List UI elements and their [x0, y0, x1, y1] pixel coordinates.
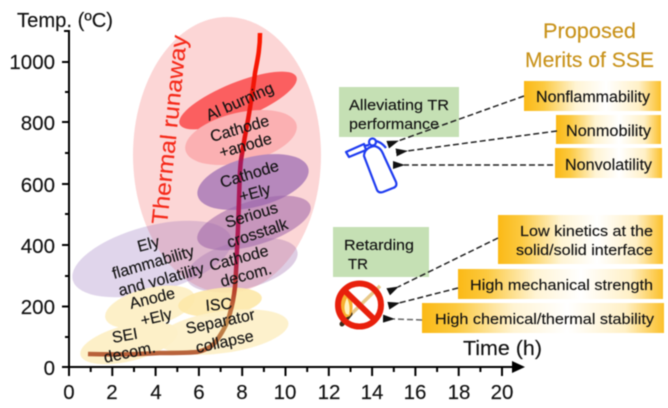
label: Cathode Ely: Cathode	[218, 158, 281, 192]
label: Cathode anode: Cathode	[208, 113, 271, 146]
y axis labels: 1000	[9, 51, 55, 74]
label: Separator collapse	[184, 307, 257, 357]
label: Separator collapse: Separator	[184, 307, 257, 338]
label: Ely flammability and volatility	[110, 234, 206, 300]
x axis labels	[63, 381, 513, 404]
panel: retarding TR: TR	[348, 256, 368, 273]
heading: proposed merits: Merits of SSE	[525, 48, 654, 72]
x axis labels: 0	[63, 381, 75, 404]
merit: high mechanical strength: High mechanical strength	[470, 277, 653, 294]
heading: proposed merits: Proposed	[543, 19, 636, 43]
label: SEI decomposition: decom.	[102, 339, 157, 367]
y axis title: Temp. (ºC)	[17, 9, 113, 32]
label: Serious crosstalk	[223, 200, 291, 252]
merit: low kinetics: Low kinetics at the	[520, 223, 653, 240]
zone: Cathode Ely ellipse	[192, 144, 314, 220]
zone: Cathode anode ellipse	[180, 100, 302, 175]
zone: Separator collapse ellipse	[155, 302, 291, 362]
y axis	[62, 31, 69, 367]
panel: alleviating TR: Alleviating TR	[349, 97, 449, 114]
zone: SEI decomposition ellipse	[76, 313, 182, 373]
label: Cathode Ely: +Ely	[238, 181, 273, 206]
label: Cathode decomposition: decom.	[219, 261, 274, 291]
y axis labels: 0	[44, 357, 55, 380]
label: ISC: ISC	[205, 296, 233, 315]
label: Al burning: Al burning	[204, 80, 276, 125]
label: Ely flammability and volatility: flammability	[110, 243, 196, 283]
merit: low kinetics: solid/solid interface	[516, 242, 653, 259]
merit: nonvolatility: Nonvolatility	[565, 157, 652, 174]
merit: high chemical thermal stability: High chemical/thermal stability	[435, 311, 655, 328]
y axis labels: 200	[21, 296, 55, 319]
zone: Anode Ely ellipse	[101, 277, 199, 337]
y axis labels	[9, 51, 55, 380]
zone: ISC ellipse	[177, 284, 263, 320]
x axis labels: 18	[448, 381, 470, 404]
panel: retarding TR: Retarding	[344, 237, 414, 254]
x axis labels: 16	[404, 381, 426, 404]
label: Anode Ely: +Ely	[139, 306, 174, 330]
x axis labels: 8	[236, 381, 248, 404]
panel: retarding TR	[333, 227, 429, 277]
y axis labels: 600	[21, 174, 55, 197]
merit: nonflammability	[524, 81, 661, 111]
arrows: no fire	[394, 238, 498, 320]
merit: nonmobility: Nonmobility	[566, 123, 651, 140]
panel: alleviating TR: performance	[349, 116, 439, 133]
merit: high chemical thermal stability	[422, 303, 664, 333]
x axis title: Time (h)	[463, 337, 542, 360]
zone: Al burning ellipse	[173, 60, 303, 141]
temperature curve	[88, 33, 260, 354]
label: Cathode anode	[208, 113, 274, 162]
label: Separator collapse: collapse	[194, 328, 255, 357]
zone: Cathode decomposition ellipse	[181, 228, 303, 302]
x axis labels: 2	[106, 381, 118, 404]
label: Ely flammability and volatility: and volatility	[117, 261, 206, 300]
icon: fire extinguisher	[346, 138, 396, 192]
zone: Serious crosstalk ellipse	[191, 185, 317, 261]
merit: nonflammability: Nonflammability	[536, 89, 650, 106]
panel: alleviating TR	[339, 87, 459, 137]
x axis labels: 12	[318, 381, 340, 404]
x axis labels: 14	[361, 381, 383, 404]
y axis labels: 400	[21, 235, 55, 258]
label: Cathode anode: +anode	[217, 131, 274, 162]
label: SEI decomposition	[102, 326, 157, 367]
zone: Ely flammability ellipse	[64, 206, 240, 312]
thermal runaway zone	[133, 17, 321, 293]
x axis	[62, 361, 525, 376]
x axis labels: 4	[150, 381, 162, 404]
y axis labels: 800	[21, 112, 55, 135]
x axis labels: 10	[274, 381, 296, 404]
label: SEI decomposition: SEI	[111, 326, 139, 347]
merit: nonvolatility	[555, 148, 662, 178]
label: Cathode decomposition	[208, 243, 274, 291]
x axis labels: 6	[193, 381, 205, 404]
merit: nonmobility	[556, 115, 661, 144]
label: Anode Ely: Anode	[128, 285, 177, 313]
x axis labels: 20	[491, 381, 513, 404]
label: Serious crosstalk: Serious	[223, 200, 280, 232]
heading: proposed merits	[525, 19, 654, 72]
label: Anode Ely	[128, 285, 177, 330]
thermal runaway label: Thermal runaway	[147, 33, 192, 226]
merit: low kinetics	[498, 215, 663, 264]
label: Serious crosstalk: crosstalk	[225, 216, 291, 252]
label: Ely flammability and volatility: Ely	[136, 234, 162, 256]
label: Cathode decomposition: Cathode	[208, 243, 271, 275]
icon: no fire	[338, 284, 381, 326]
merit: high mechanical strength	[458, 269, 663, 299]
arrows: fire extinguisher	[398, 96, 557, 165]
